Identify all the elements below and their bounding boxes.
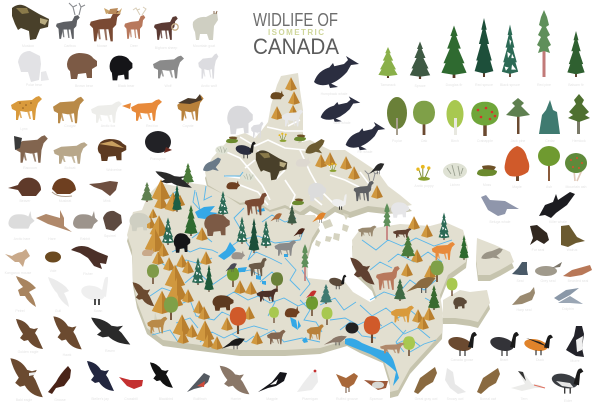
icon: grouse (48, 366, 71, 402)
birds bottom row (10, 326, 584, 403)
icon: bobcat: Bobcat (65, 166, 75, 170)
icon: bullfinch: Bullfinch (193, 397, 207, 401)
tree: apple: Crabapple (477, 139, 493, 143)
icon: arctic hare: Arctic hare (14, 237, 30, 241)
icon: hawk eagle: Hawk (63, 353, 72, 357)
icon: spruce grouse (336, 373, 358, 401)
icon: fisher (71, 246, 108, 276)
icon: bighorn sheep (154, 16, 178, 50)
icon: red crossbill: Crossbill (124, 397, 138, 401)
icon: grouse: Grouse (54, 398, 66, 402)
icon: vole: Vole (50, 269, 56, 273)
tree: birch (446, 100, 464, 143)
land: newfoundland (476, 238, 514, 275)
land: maritimes (443, 290, 490, 322)
icon: wolverine: Wolverine (106, 168, 122, 172)
mountains (144, 77, 436, 350)
tree: larch (378, 47, 398, 87)
tree: green fir: Douglas fir (446, 83, 463, 87)
icon: brown bear: Brown bear (75, 84, 94, 88)
icon: hare (36, 210, 72, 241)
tree: pine: Jack pine (511, 139, 525, 143)
icon: dolphins: Dolphin (562, 307, 574, 311)
icon: wolverine (98, 139, 126, 172)
icon: rabbit (73, 211, 98, 241)
icon: muskrat: Muskrat (59, 199, 71, 203)
icon: arctic fox: Arctic fox (101, 124, 115, 128)
icon: grey wolf (153, 56, 184, 88)
icon: blue bird: Steller's jay (91, 397, 109, 401)
icon: lynx (11, 96, 42, 131)
icon: beaver (8, 178, 41, 203)
trees row 2 (387, 94, 590, 143)
icon: eider: Eider (564, 399, 573, 403)
tree: pine (506, 98, 530, 143)
icon: arctic hare (8, 211, 35, 241)
icon: mink (89, 181, 118, 203)
tree: red maple (505, 146, 529, 189)
icon: boreal owl (477, 368, 500, 401)
icon: red crossbill (119, 377, 143, 401)
icon: spruce grouse: Ruffed grouse (336, 397, 358, 401)
plant: flowers: Arctic poppy (414, 184, 434, 188)
land: arctic islands (205, 73, 412, 213)
whale: right whale (321, 96, 360, 125)
icon: king eider (523, 335, 553, 362)
lakes (195, 206, 399, 386)
icon: deer: Deer (130, 44, 139, 48)
icon: canada goose (447, 332, 477, 362)
whale: right whale: Blue whale (333, 121, 351, 125)
icon: grey seal: Grey seal (541, 279, 556, 283)
tree: snow spruce: Black spruce (500, 83, 520, 87)
icon: black goose (489, 332, 519, 362)
land: mainland (127, 183, 468, 392)
icon: canada goose: Canada goose (451, 358, 473, 362)
icon: black goose: Brant (500, 358, 508, 362)
icon: fisher: Fisher (83, 272, 94, 276)
icon: caribou: Caribou (64, 44, 76, 48)
icon: murre: Murre (570, 359, 580, 363)
icon: deer (124, 7, 146, 48)
icon: king eider: Duck (536, 358, 544, 362)
icon: bobcat (54, 142, 88, 170)
map trees (141, 163, 469, 356)
icon: ptarmigan: Ptarmigan (302, 397, 318, 401)
map rim shadow (127, 79, 514, 398)
icon: muskrat (52, 178, 76, 203)
icon: jumping mouse (5, 249, 31, 275)
icon: arctic fox (91, 101, 122, 128)
icon: bullfinch (187, 373, 210, 401)
icon: harbour seal: Seal (516, 279, 524, 283)
icon: orca: Killer whale (549, 220, 567, 224)
icon: coyote (177, 94, 204, 128)
icon: red fox: Red fox (146, 124, 158, 128)
tree: olive poplar (387, 97, 407, 143)
icon: raven: Raven (105, 349, 115, 353)
plants and trees row 3 (414, 146, 587, 189)
icon: eider (550, 368, 583, 403)
great lakes (345, 338, 399, 386)
marine mammals right (481, 192, 592, 312)
whale: humpback 2: Fin whale (358, 150, 373, 154)
land mammals column (5, 3, 218, 276)
icon: arctic wolf: Arctic wolf (201, 84, 217, 88)
icon: jumping mouse: Kangaroo mouse (5, 271, 31, 275)
icon: brown bear (67, 53, 97, 88)
icon: grey wolf: Wolf (165, 84, 171, 88)
plant: moss: Moss (483, 183, 491, 187)
tree: teal cedar (539, 100, 560, 143)
icon: boreal owl: Boreal owl (480, 397, 496, 401)
icon: raccoon (14, 135, 48, 170)
icon: beaver: Beaver (19, 199, 31, 203)
icon: hare: Hare (48, 237, 56, 241)
icon: lynx: Lynx (20, 127, 28, 131)
birds left column (15, 276, 130, 357)
icon: muskox (12, 5, 49, 48)
icon: mountain goat: Mountain goat (193, 44, 215, 48)
icon: golden eagle: Golden eagle (18, 350, 38, 354)
icon: harp seal: Harp seal (517, 308, 532, 312)
icon: polar bear: Polar bear (26, 83, 43, 87)
icon: swan: Swan (94, 309, 102, 313)
title line: widlife of: WIDLIFE OF (253, 10, 338, 30)
tree: tall pine (537, 10, 551, 87)
icon: brown hawk (220, 366, 249, 401)
whale: humpback 2 (346, 122, 385, 154)
tree: dark spruce (475, 18, 493, 87)
tree: spruce: Spruce (414, 84, 426, 88)
tree: dark spruce: Red spruce (475, 83, 493, 87)
icon: black bird (150, 362, 173, 401)
icon: beluga whale: Beluga whale (489, 220, 511, 224)
icon: white gull: Gull (55, 309, 61, 313)
tree: mountain ash: Mountain ash (565, 185, 587, 189)
icon: snowy owl: Snowy owl (447, 397, 464, 401)
icon: cougar (53, 97, 84, 128)
icon: moose: Moose (97, 44, 107, 48)
tree: snow spruce (500, 25, 520, 87)
icon: porcupine: Porcupine (150, 157, 166, 161)
icon: bald eagle (10, 358, 43, 402)
icon: bearded seal: Bearded seal (568, 279, 589, 283)
trees row 1 (378, 10, 585, 88)
icon: snowy owl (445, 368, 466, 401)
icon: ptarmigan (297, 370, 318, 401)
icon: black bear (110, 56, 135, 88)
icon: polar bear (18, 51, 49, 87)
title line: canada: CANADA (253, 34, 339, 59)
icon: caribou (56, 3, 85, 48)
tree: green tree: Ash (546, 185, 552, 189)
icon: brown hawk: Harrier (231, 397, 242, 401)
tree: birch: Birch (451, 139, 459, 143)
tree: hemlock: Hemlock (572, 139, 586, 143)
icon: squirrel (103, 211, 122, 238)
tree: green tree (538, 146, 560, 189)
plant: lichen (443, 163, 467, 187)
icon: tern: Tern (521, 397, 527, 401)
icon: vole (45, 252, 61, 273)
icon: arctic wolf (198, 53, 218, 88)
icon: tan seabird: Petrel (15, 309, 25, 313)
rivers (150, 172, 452, 352)
icon: coyote: Coyote (182, 124, 194, 128)
tree: spruce (410, 42, 430, 88)
icon: black bear: Black bear (118, 84, 135, 88)
tree: mountain ash (565, 153, 587, 189)
icon: rabbit: Rabbit (80, 237, 90, 241)
icon: blue bird (87, 361, 114, 401)
plant: flowers (414, 165, 434, 188)
icon: murre (566, 326, 584, 363)
plant: moss (477, 165, 497, 187)
tree: dark fir (567, 31, 585, 87)
icon: muskox: Muskox (22, 44, 34, 48)
title (253, 10, 339, 59)
tree: oak (413, 101, 435, 143)
icon: squirrel: Squirrel (104, 234, 116, 238)
tree: apple (471, 102, 499, 143)
icon: magpie: Magpie (266, 397, 278, 401)
icon: sparrow: Sparrow (369, 397, 383, 401)
icon: black bird: Blackbird (159, 397, 173, 401)
icon: bald eagle: Bald eagle (16, 398, 32, 402)
icon: raccoon: Raccoon (23, 166, 37, 170)
icon: brown owl: Great gray owl (415, 397, 438, 401)
icon: sparrow (364, 380, 388, 401)
icon: red fox (122, 99, 162, 128)
arctic channels (222, 120, 372, 208)
panel: map of Canada (127, 73, 514, 398)
tree: teal cedar: Cedar (545, 139, 556, 143)
subtitle: isometric: ISOMETRIC (268, 28, 324, 37)
tree: green fir (441, 26, 467, 87)
icon: dark seal: Fur seal (532, 248, 545, 252)
tree: dark fir: Balsam fir (568, 83, 585, 87)
land: small islands (154, 213, 349, 326)
tree: red maple: Maple (512, 185, 522, 189)
icon: magpie (258, 372, 287, 401)
icon: mountain goat (193, 11, 218, 48)
tree: oak: Oak (421, 139, 427, 143)
tree: olive poplar: Poplar (392, 139, 403, 143)
icon: cougar: Cougar (64, 124, 77, 128)
tree: hemlock (568, 94, 590, 143)
plant: lichen: Lichen (450, 183, 460, 187)
icon: mink: Mink (103, 199, 111, 203)
map wildlife (130, 90, 503, 353)
tree: tall pine: Red pine (537, 83, 551, 87)
icon: bighorn sheep: Bighorn sheep (155, 46, 177, 50)
icon: walrus: Walrus (567, 248, 578, 252)
icon: brown owl (414, 367, 438, 401)
icon: moose (90, 8, 122, 48)
whale: humpback 1 (314, 56, 359, 96)
tree: larch: Tamarack (380, 83, 396, 87)
whale: humpback 1: Humpback whale (321, 92, 347, 96)
icon: tern (511, 371, 545, 401)
icon: porcupine (145, 131, 172, 161)
